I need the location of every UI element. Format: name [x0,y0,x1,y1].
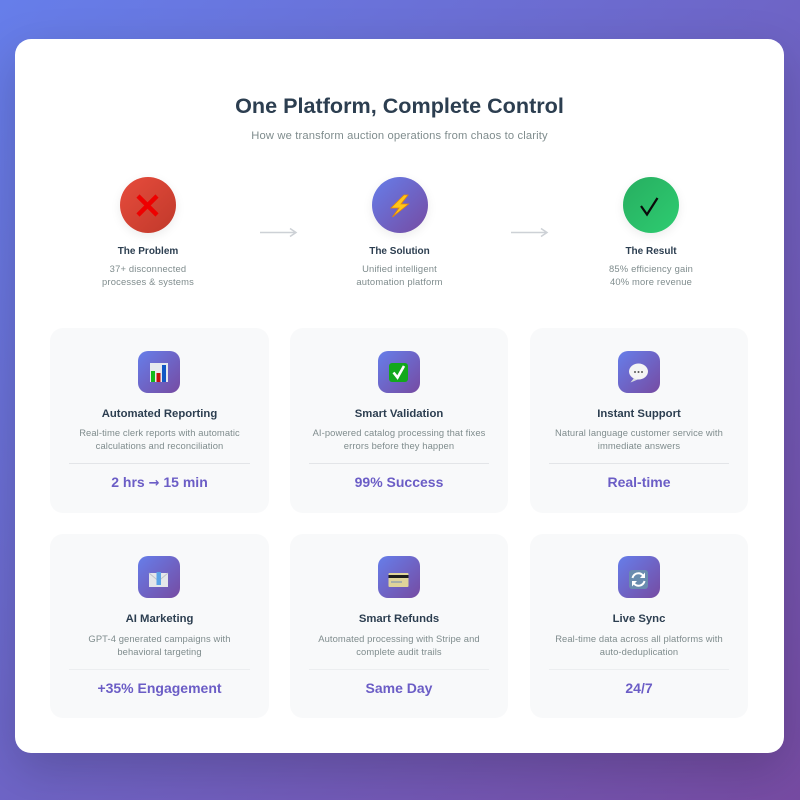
text: result description: 85% efficiency gain [609,262,693,274]
text: problem description: 37+ disconnected [110,262,186,274]
description: calculations and reconciliation [96,440,223,451]
text: solution description: automation platform [356,276,443,286]
icon: green check box [378,351,420,393]
description: Natural language customer service with [555,427,723,438]
description [318,633,480,657]
panel: ai marketing [50,534,269,718]
heading: Live Sync [613,613,665,625]
description: auto-deduplication [600,646,678,657]
icon: check mark [623,177,679,233]
subtitle: How we transform auction operations from chaos to clarity [251,130,548,142]
icon: envelope [138,556,180,598]
description [88,633,231,657]
text: solution description [356,262,443,287]
description: complete audit trails [356,646,442,657]
text: result description [609,262,693,286]
panel: smart validation [290,328,508,513]
title: One Platform, Complete Control [235,93,564,118]
metric: 24/7 [625,680,653,696]
heading: the result: The Result [625,246,677,256]
description: Real-time clerk reports with automatic [79,427,240,438]
panel: live sync [530,534,748,718]
arrow: solution to result [511,228,548,237]
heading: Automated Reporting [102,408,217,420]
metric: Real-time [607,474,671,490]
heading: Smart Refunds [359,613,439,625]
heading: Instant Support [597,408,681,420]
description [312,427,485,451]
heading: Smart Validation [355,408,443,420]
metric: 2 hrs → 15 min [111,474,208,491]
icon: bar chart [138,351,180,393]
description: errors before they happen [344,440,454,451]
description: Automated processing with Stripe and [318,633,480,644]
panel: automated reporting [50,328,269,513]
step: the result [609,177,693,286]
arrow: problem to solution [260,228,297,237]
text: result description: 40% more revenue [610,276,692,286]
description: immediate answers [598,440,680,451]
heading: the solution: The Solution [369,246,430,256]
description [79,427,240,451]
icon: red cross [120,177,176,233]
text: problem description: processes & systems [102,276,194,286]
icon: refresh arrows [618,556,660,598]
icon: credit card [378,556,420,598]
metric: Same Day [366,680,432,696]
description [555,427,723,451]
step: the solution [356,177,443,287]
text: solution description: Unified intelligent [362,262,437,274]
heading: AI Marketing [126,613,193,625]
description: AI-powered catalog processing that fixes [313,427,485,438]
icon: speech bubble [618,351,660,393]
step: the problem [102,177,194,287]
description: Real-time data across all platforms with [555,633,723,644]
description [555,633,723,657]
icon: lightning bolt [372,177,428,233]
description: GPT-4 generated campaigns with [88,633,231,644]
panel: smart refunds [290,534,508,718]
metric: 99% Success [355,474,443,490]
heading: the problem: The Problem [118,246,178,256]
metric: +35% Engagement [97,680,222,696]
panel: instant support [530,328,748,513]
text: problem description [102,262,194,287]
description: behavioral targeting [117,646,202,657]
